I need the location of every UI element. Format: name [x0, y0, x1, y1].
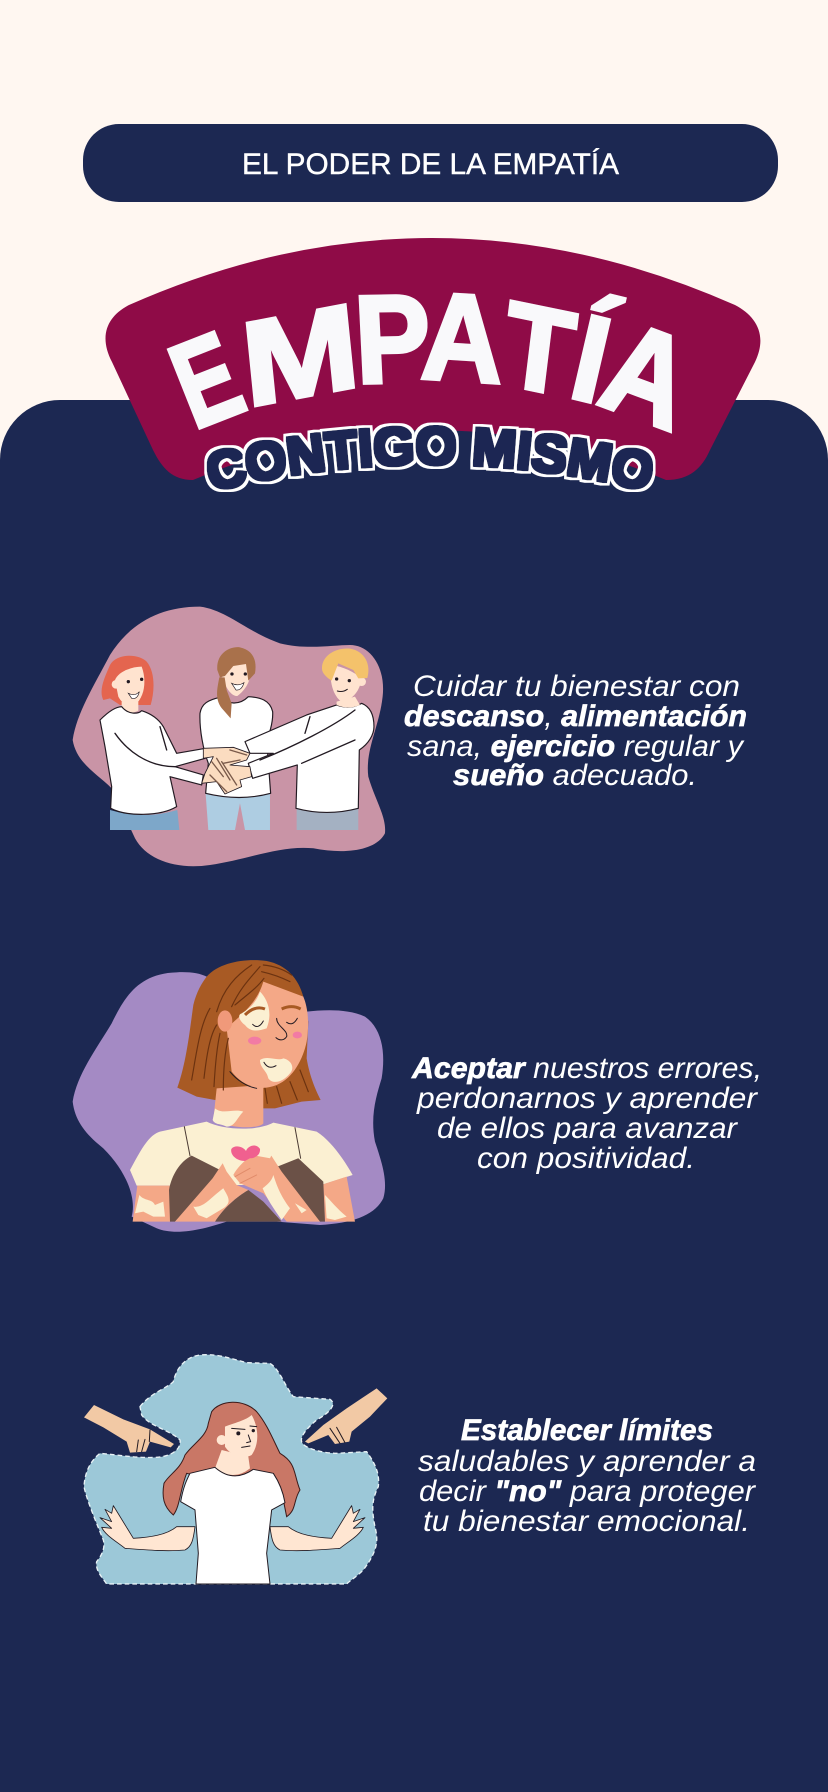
left hand and forearm — [175, 1163, 248, 1222]
heading: EMPATÍA: M — [236, 278, 365, 433]
pointing hand right — [305, 1388, 387, 1444]
illustration: woman setting boundaries with pointing hands — [84, 1355, 387, 1584]
navy background panel — [0, 400, 828, 1792]
illustration: three people joining hands — [73, 607, 385, 866]
heading: EMPATÍA: A — [419, 267, 506, 410]
heading: EMPATÍA: P — [352, 269, 434, 410]
subheading: CONTIGO MISMO: CONTIGO MISMO — [204, 422, 656, 492]
text: aceptar: con positividad. — [477, 1142, 695, 1175]
apron — [169, 1156, 325, 1222]
text: establecer limites: Establecer límites — [461, 1414, 713, 1447]
text: cuidar tu bienestar: sueño adecuado. — [453, 759, 697, 792]
text: establecer limites — [418, 1414, 756, 1538]
shirt — [130, 1122, 353, 1186]
top title pill — [83, 124, 778, 202]
right arm and hand — [270, 1506, 365, 1551]
heading: EMPATÍA — [153, 267, 708, 458]
heading: EMPATÍA: E — [153, 306, 260, 454]
text: cuidar tu bienestar: descanso, alimentación — [404, 700, 747, 733]
text: aceptar — [411, 1052, 762, 1175]
text: aceptar: de ellos para avanzar — [437, 1112, 738, 1145]
neck — [213, 1085, 263, 1127]
heart — [231, 1145, 260, 1161]
text: establecer limites: decir "no" para proteger — [419, 1475, 756, 1508]
text: aceptar: Aceptar nuestros errores, — [411, 1052, 762, 1085]
heading: EMPATÍA: A — [587, 291, 708, 458]
light blue blob with dashed outline — [84, 1355, 379, 1584]
purple blob — [73, 972, 385, 1232]
banner: maroon arched shape — [106, 238, 760, 480]
face — [218, 982, 308, 1088]
arms — [133, 1177, 355, 1222]
pointing hand left — [84, 1405, 174, 1453]
text: cuidar tu bienestar: sana, ejercicio regular y — [407, 730, 745, 763]
illustration: woman with hand on heart — [73, 960, 385, 1232]
text: aceptar: perdonarnos y aprender — [416, 1082, 758, 1115]
heading: EMPATÍA: Í — [560, 290, 625, 430]
woman — [100, 1402, 365, 1584]
text: cuidar tu bienestar: Cuidar tu bienestar con — [413, 670, 740, 703]
text: cuidar tu bienestar — [404, 670, 747, 792]
person left — [100, 656, 205, 830]
top title pill: EL PODER DE LA EMPATÍA — [242, 148, 619, 181]
person centre — [200, 647, 273, 830]
stacked hands — [202, 747, 252, 794]
hair strands — [192, 965, 308, 1103]
text: establecer limites: saludables y aprender a — [418, 1445, 756, 1478]
pink blob — [73, 607, 385, 866]
hair — [177, 960, 321, 1108]
skin patches on hands — [193, 1175, 307, 1220]
heading: EMPATÍA: T — [497, 275, 582, 422]
text: establecer limites: tu bienestar emocional. — [423, 1505, 750, 1538]
left arm and hand — [100, 1506, 195, 1551]
right hand and forearm — [233, 1155, 320, 1222]
person right — [245, 649, 374, 830]
